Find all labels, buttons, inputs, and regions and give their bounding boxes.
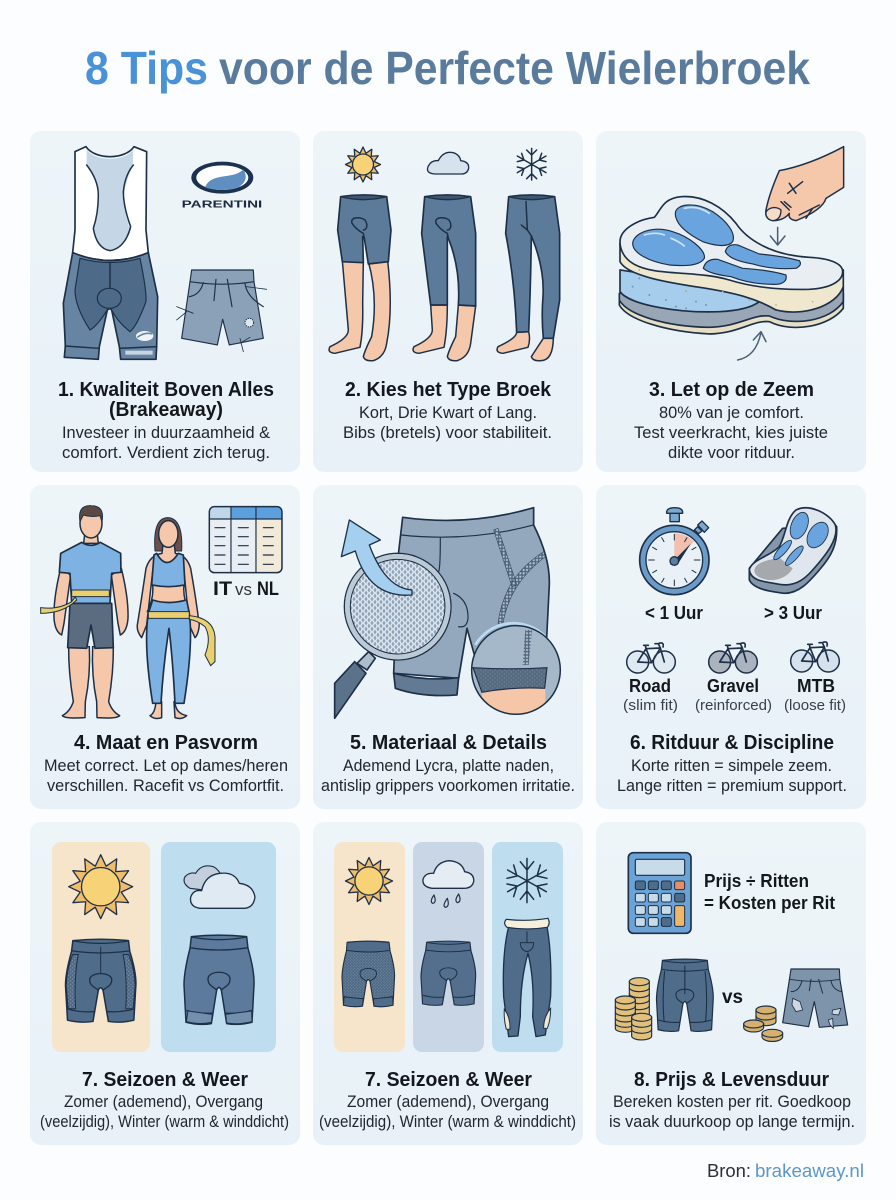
text: tip 1 description: Investeer in duurzaamheid & bbox=[62, 423, 271, 442]
panel: tip 2 type bbox=[313, 131, 583, 472]
label: mtb: MTB bbox=[797, 676, 835, 696]
panel: tip 7 season two columns bbox=[30, 822, 300, 1145]
icon: mtb bbox=[791, 642, 839, 672]
label: mtb bbox=[784, 676, 846, 714]
panel: mid season column bbox=[161, 842, 276, 1052]
text: tip 3 description: dikte voor ritduur. bbox=[668, 443, 795, 462]
panel: winter column bbox=[492, 842, 563, 1052]
text: tip 2 description: Kort, Drie Kwart of Lang. bbox=[359, 403, 537, 422]
text: tip 1 description bbox=[62, 423, 271, 462]
text: cost formula: Prijs ÷ Ritten bbox=[704, 871, 809, 891]
icon: tall coin stacks bbox=[615, 978, 652, 1040]
illustration: magnifier with mesh bbox=[335, 553, 451, 718]
icon: size table bbox=[209, 507, 282, 573]
illustration: long tights bbox=[497, 195, 560, 361]
illustration: summer shorts bbox=[66, 939, 136, 1022]
arrow: press down bbox=[770, 227, 785, 245]
icon: sun bbox=[346, 147, 380, 182]
heading: tip 5: 5. Materiaal & Details bbox=[350, 732, 547, 754]
icon: snowflake bbox=[507, 858, 547, 903]
text: tip 3 description: Test veerkracht, kies juiste bbox=[634, 423, 828, 442]
icon: calculator bbox=[628, 853, 691, 933]
illustration: hand pressing bbox=[766, 147, 844, 221]
icon: cloud bbox=[427, 152, 469, 174]
illustration: shorts close-up bbox=[394, 508, 549, 696]
illustration: quality shorts bbox=[656, 959, 713, 1031]
text: tip 4 description: verschillen. Racefit vs Comfortfit. bbox=[47, 776, 284, 795]
text: tip 2 description: Bibs (bretels) voor stabiliteit. bbox=[343, 423, 552, 442]
illustration: short tights bbox=[329, 195, 391, 361]
illustration: rain shorts bbox=[421, 941, 476, 1005]
illustration: worn shorts bbox=[783, 969, 848, 1028]
text: tip 7 description: (veelzijdig), Winter (warm & winddicht) bbox=[40, 1112, 289, 1131]
label: road bbox=[623, 676, 678, 714]
panel: tip 3 chamois bbox=[596, 131, 866, 472]
text: cost formula bbox=[704, 871, 835, 913]
text: cost formula: = Kosten per Rit bbox=[704, 893, 835, 913]
label: more than three hours: > 3 Uur bbox=[764, 602, 822, 623]
heading: tip 1: (Brakeaway) bbox=[109, 399, 223, 421]
source credit: brakeaway.nl bbox=[755, 1160, 864, 1181]
illustration: woman with tape bbox=[137, 518, 215, 718]
icon: bib shorts bbox=[63, 147, 267, 359]
label: mtb: (loose fit) bbox=[784, 697, 846, 714]
panel: summer column bbox=[52, 842, 150, 1052]
label: IT vs NL bbox=[213, 579, 279, 600]
label: road: Road bbox=[629, 676, 671, 696]
heading: tip 2: 2. Kies het Type Broek bbox=[345, 379, 552, 401]
icon: road bike bbox=[627, 643, 675, 673]
heading: tip 7: 7. Seizoen & Weer bbox=[82, 1069, 248, 1091]
illustration: three quarter tights bbox=[413, 195, 476, 361]
illustration: man with tape bbox=[41, 506, 128, 718]
title: voor de Perfecte Wielerbroek bbox=[219, 42, 810, 94]
label: gravel: Gravel bbox=[707, 676, 759, 696]
heading: tip 1 bbox=[58, 379, 274, 421]
heading: tip 6: 6. Ritduur & Discipline bbox=[630, 732, 834, 754]
label: gravel bbox=[695, 676, 772, 714]
heading: tip 8: 8. Prijs & Levensduur bbox=[634, 1069, 829, 1091]
text: tip 8 description bbox=[609, 1092, 855, 1131]
text: tip 8 description: is vaak duurkoop op lange termijn. bbox=[609, 1112, 855, 1131]
panel: summer column bbox=[334, 842, 405, 1052]
text: tip 4 description: Meet correct. Let op dames/heren bbox=[44, 756, 288, 775]
illustration: mid season shorts bbox=[184, 935, 254, 1024]
label: less than one hour: < 1 Uur bbox=[645, 602, 703, 623]
icon: bib shorts: PARENTINI bbox=[182, 199, 263, 210]
arrow: airflow out bbox=[341, 520, 412, 595]
text: tip 7 repeat description: Zomer (ademend), Overgang bbox=[347, 1092, 549, 1111]
text: tip 6 description: Korte ritten = simpele zeem. bbox=[631, 756, 832, 775]
icon: gravel bike bbox=[709, 643, 757, 673]
label: gravel: (reinforced) bbox=[695, 697, 772, 714]
panel: rain column bbox=[413, 842, 484, 1052]
heading: tip 3: 3. Let op de Zeem bbox=[649, 379, 814, 401]
heading: tip 7 repeat: 7. Seizoen & Weer bbox=[365, 1069, 532, 1091]
icon: rain cloud bbox=[423, 861, 474, 907]
text: tip 6 description: Lange ritten = premium support. bbox=[617, 776, 847, 795]
icon: sun bbox=[69, 855, 133, 919]
text: tip 3 description: 80% van je comfort. bbox=[659, 403, 804, 422]
illustration: gripper detail circle bbox=[472, 623, 562, 718]
arrow: rebound bbox=[738, 332, 766, 360]
text: tip 7 description: Zomer (ademend), Overgang bbox=[64, 1092, 263, 1111]
panel: tip 4 size bbox=[30, 485, 300, 809]
text: tip 4 description bbox=[44, 756, 288, 795]
source credit bbox=[707, 1160, 864, 1181]
panel: tip 6 duration bbox=[596, 485, 866, 809]
illustration: chamois layers bbox=[619, 197, 843, 334]
text: tip 3 description bbox=[634, 403, 828, 462]
label: IT vs NL: NL bbox=[257, 579, 279, 600]
panel: tip 8 price bbox=[596, 822, 866, 1145]
text: tip 6 description bbox=[617, 756, 847, 795]
icon: sun bbox=[346, 858, 392, 904]
label: vs: vs bbox=[722, 987, 743, 1008]
panel: tip 5 material bbox=[313, 485, 583, 809]
text: tip 8 description: Bereken kosten per rit. Goedkoop bbox=[613, 1092, 851, 1111]
text: tip 7 repeat description: (veelzijdig), Winter (warm & winddicht) bbox=[319, 1112, 576, 1131]
text: tip 7 description bbox=[40, 1092, 289, 1131]
label: road: (slim fit) bbox=[623, 697, 678, 714]
text: tip 5 description bbox=[321, 756, 575, 795]
illustration: summer mesh shorts bbox=[342, 941, 395, 1007]
panel: tip 7 season three columns bbox=[313, 822, 583, 1145]
icon: thick chamois bbox=[749, 508, 837, 593]
text: tip 7 repeat description bbox=[319, 1092, 576, 1131]
illustration: winter tights bbox=[503, 918, 551, 1037]
label: IT vs NL: vs bbox=[235, 580, 252, 599]
title: 8 Tips bbox=[85, 42, 208, 94]
text: tip 5 description: Ademend Lycra, platte naden, bbox=[343, 756, 554, 775]
text: tip 5 description: antislip grippers voorkomen irritatie. bbox=[321, 776, 575, 795]
text: tip 1 description: comfort. Verdient zich terug. bbox=[62, 443, 270, 462]
heading: tip 1: 1. Kwaliteit Boven Alles bbox=[58, 379, 274, 401]
label: IT vs NL: IT bbox=[213, 579, 232, 600]
source credit: Bron: bbox=[707, 1160, 751, 1181]
icon: snowflake bbox=[517, 148, 546, 180]
heading: tip 4: 4. Maat en Pasvorm bbox=[74, 732, 258, 754]
panel: tip 1 quality bbox=[30, 131, 300, 472]
text: tip 2 description bbox=[343, 403, 552, 442]
icon: small coins bbox=[744, 1006, 783, 1041]
icon: stopwatch bbox=[640, 508, 709, 595]
icon: clouds bbox=[184, 866, 255, 908]
